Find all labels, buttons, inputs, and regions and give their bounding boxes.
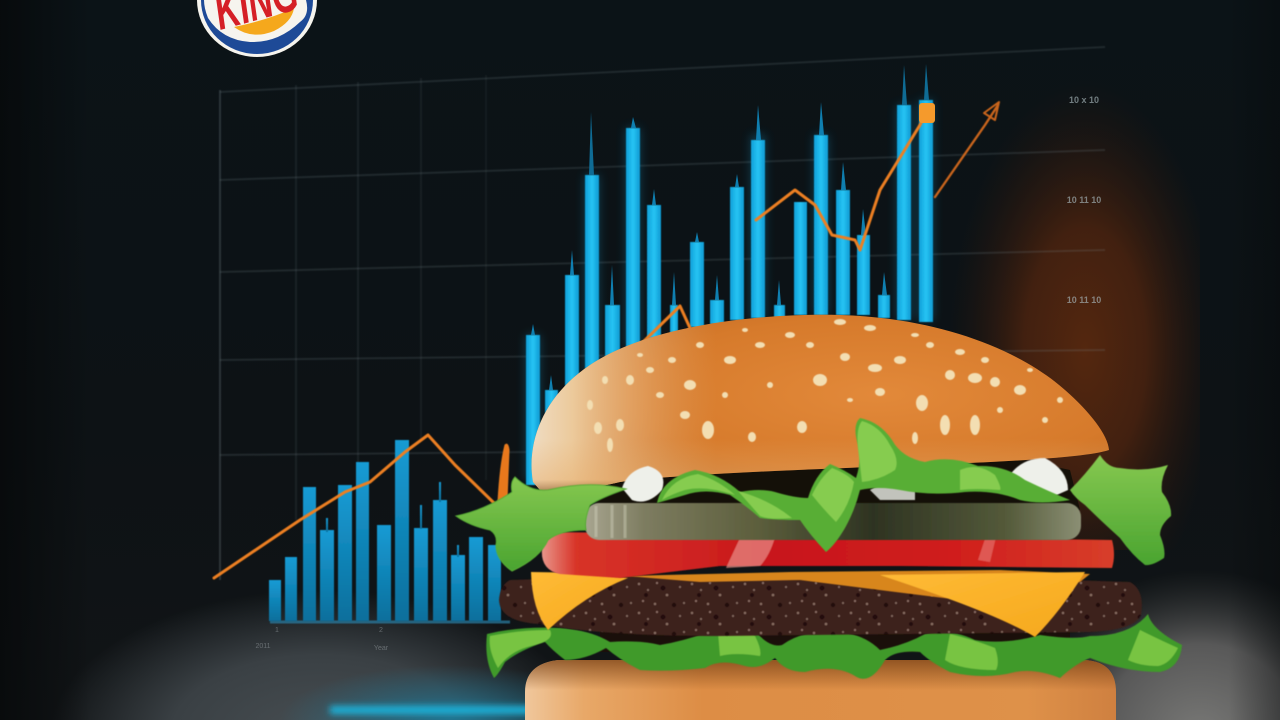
upper lettuce left [456, 477, 626, 571]
shadow above bottom lettuce [600, 630, 1070, 652]
chart grid [220, 47, 1105, 622]
upper lettuce middle [657, 418, 1070, 552]
x-axis labels [255, 627, 389, 652]
x-axis labels: Year [374, 645, 389, 652]
sesame seeds [587, 319, 1063, 452]
x-axis labels: 2 [379, 627, 383, 634]
onion pieces [622, 458, 1068, 502]
trend arrow marker [919, 103, 935, 123]
y-axis labels: 10 11 10 [1067, 195, 1101, 205]
orange trend line [214, 102, 999, 578]
bar wicks [531, 64, 929, 390]
tomato [542, 532, 1114, 578]
x-axis labels: 1 [275, 627, 279, 634]
dark gap beneath bun [590, 455, 1080, 510]
x-axis labels: 2011 [255, 643, 271, 650]
bottom lettuce [486, 614, 1182, 679]
y-axis labels: 10 11 10 [1067, 295, 1101, 305]
y-axis labels [1067, 95, 1101, 305]
glowing floor strip [330, 706, 535, 714]
upper lettuce right [1070, 455, 1171, 565]
pickle [585, 503, 1081, 540]
bottom bun [525, 660, 1116, 720]
burger [456, 315, 1182, 720]
patty [499, 575, 1142, 636]
y-axis labels: 10 x 10 [1069, 95, 1099, 105]
cheese [531, 570, 1090, 637]
lower lettuce highlights [490, 629, 1178, 670]
bar chart: upper right cluster [526, 100, 933, 485]
bar chart: lower left cluster [269, 440, 501, 621]
top bun [532, 315, 1109, 492]
logo [197, 0, 317, 57]
upper lettuce highlights [662, 421, 1000, 522]
bar glow [526, 100, 933, 480]
